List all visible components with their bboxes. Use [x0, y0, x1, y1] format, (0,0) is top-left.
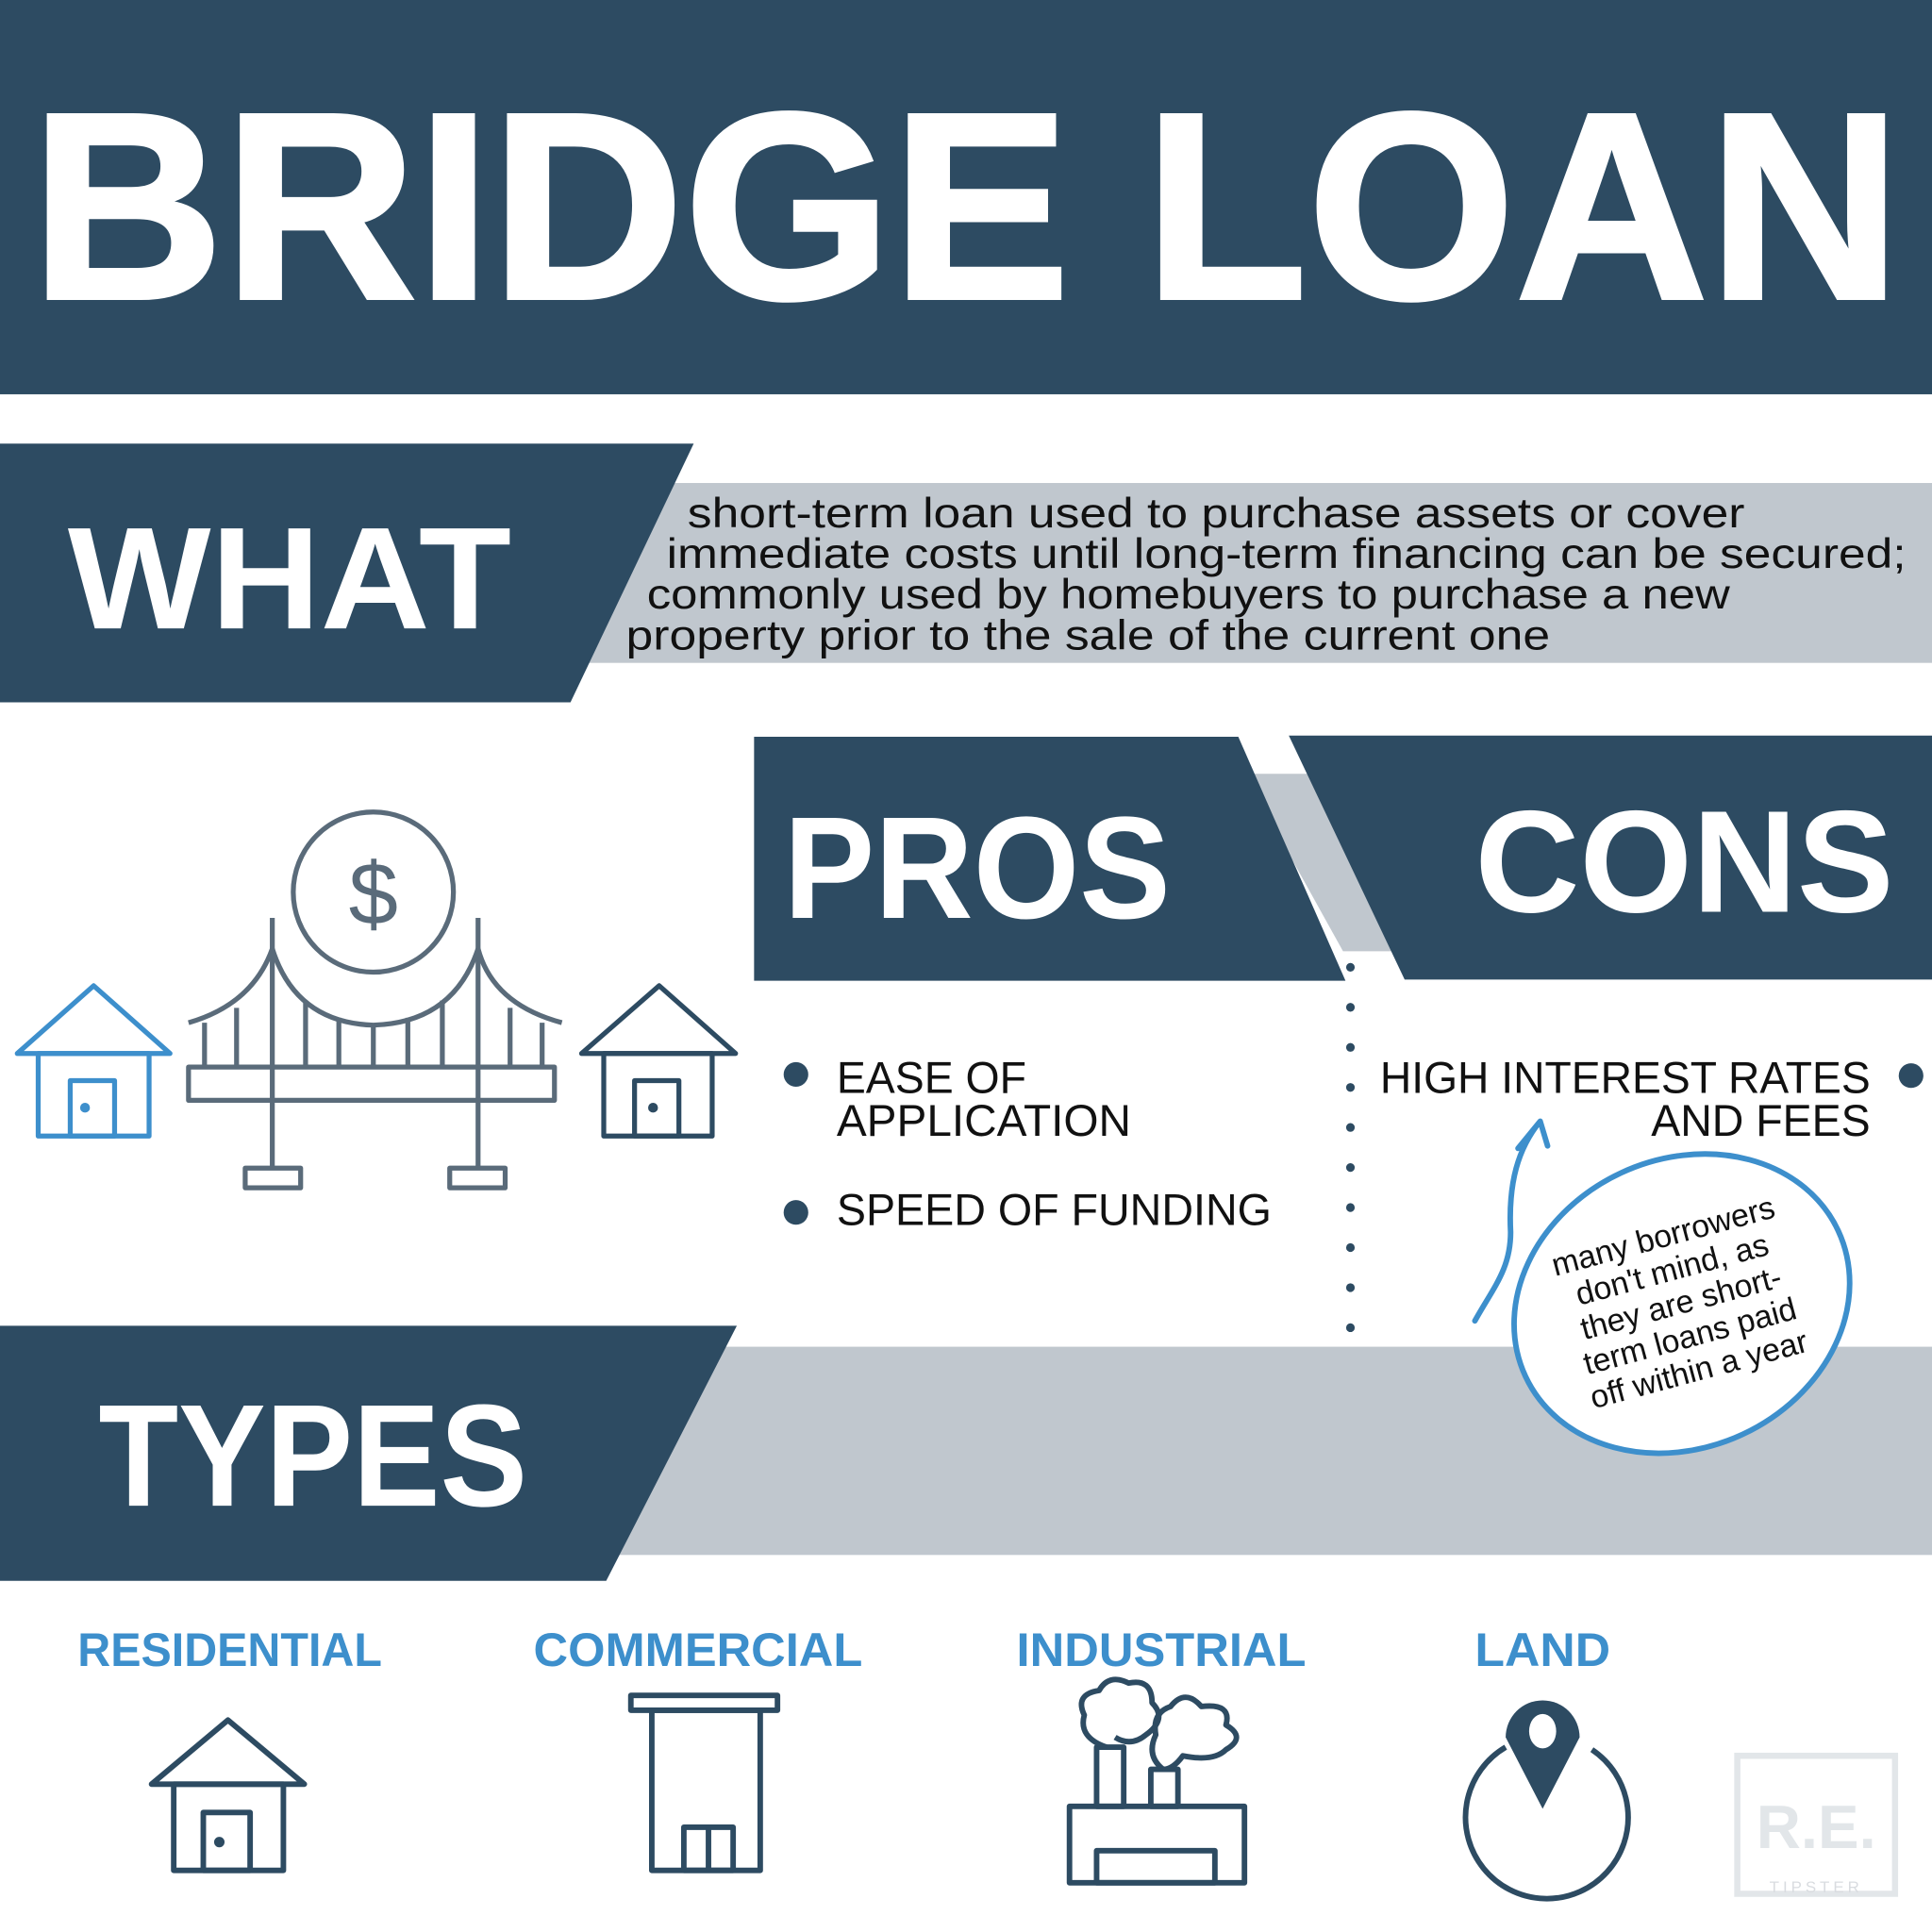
list: cons: [1380, 1053, 1924, 1145]
callout: borrowers note: term loans paid: [1580, 1291, 1800, 1382]
type labels: COMMERCIAL: [534, 1624, 862, 1676]
type labels: [77, 1624, 1610, 1676]
text block: definition: short-term loan used to purchase assets or cover: [688, 491, 1745, 537]
watermark logo: [1738, 1756, 1895, 1896]
callout: borrowers note: off within a year: [1587, 1324, 1811, 1416]
icon: land pin: [1466, 1700, 1628, 1899]
panel: pros cons header: [754, 736, 1932, 981]
watermark logo: TIPSTER: [1770, 1878, 1863, 1896]
heading: what: WHAT: [68, 496, 511, 659]
icon: bridge with houses: [17, 812, 736, 1188]
type labels: RESIDENTIAL: [77, 1624, 382, 1676]
arrow: [1474, 1122, 1547, 1321]
heading: types: TYPES: [98, 1374, 527, 1537]
divider dots: [1347, 967, 1354, 1331]
text block: definition: property prior to the sale of the current one: [626, 612, 1550, 658]
list: pros: [784, 1053, 1272, 1234]
type labels: LAND: [1474, 1624, 1610, 1676]
icon: commercial building: [631, 1695, 777, 1871]
panel: types: [0, 1325, 1932, 1581]
text block: definition: immediate costs until long-term financing can be secured;: [667, 531, 1907, 577]
icon: industrial factory: [1070, 1679, 1244, 1883]
title banner: BRIDGE LOAN: [31, 58, 1901, 355]
callout: borrowers note: [1465, 1100, 1899, 1507]
icon: bridge with houses: $: [349, 844, 398, 943]
list: pros: SPEED OF FUNDING: [837, 1184, 1272, 1234]
heading: pros: PROS: [784, 786, 1171, 949]
callout: borrowers note: many borrowers: [1548, 1190, 1779, 1284]
heading: cons: CONS: [1474, 780, 1894, 943]
callout: borrowers note: don't mind, as: [1572, 1227, 1773, 1313]
type labels: INDUSTRIAL: [1017, 1624, 1306, 1676]
icon: residential house: [152, 1720, 305, 1871]
text block: definition: commonly used by homebuyers to purchase a new: [647, 572, 1731, 618]
watermark logo: R.E.: [1757, 1792, 1876, 1861]
list: cons: AND FEES: [1651, 1095, 1871, 1145]
list: pros: APPLICATION: [837, 1095, 1131, 1145]
list: pros: EASE OF: [837, 1053, 1026, 1103]
text block: definition: [626, 491, 1907, 658]
panel: what: [0, 443, 1932, 702]
list: cons: HIGH INTEREST RATES: [1380, 1053, 1871, 1103]
callout: borrowers note: they are short-: [1576, 1259, 1786, 1347]
